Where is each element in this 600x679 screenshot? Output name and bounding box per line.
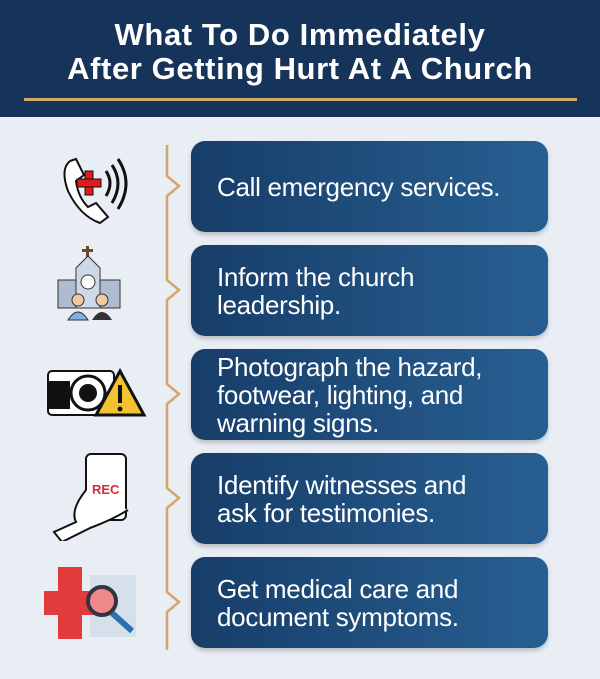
title: After Getting Hurt At A Church <box>67 51 533 86</box>
step 4 box <box>191 453 548 544</box>
step 5 box: document symptoms. <box>217 602 459 632</box>
step 2 box: Inform the church <box>217 262 414 292</box>
icon: medical cross and document <box>44 567 136 639</box>
step 4 box: Identify witnesses and <box>217 470 466 500</box>
timeline line with chevrons <box>166 145 181 650</box>
icon: phone recording in hand <box>52 453 128 541</box>
step 2 box: leadership. <box>217 290 341 320</box>
title: What To Do Immediately <box>115 17 485 52</box>
header <box>0 0 600 117</box>
step 1 box <box>191 141 548 232</box>
step 5 box: Get medical care and <box>217 574 458 604</box>
step 4 box: ask for testimonies. <box>217 498 435 528</box>
step 2 box <box>191 245 548 336</box>
step 3 box: footwear, lighting, and <box>217 380 463 410</box>
icon: camera and warning <box>47 368 146 416</box>
step 3 box: Photograph the hazard, <box>217 352 482 382</box>
icon: phone recording in hand: REC <box>92 482 120 497</box>
title <box>67 17 533 86</box>
step 1 box: Call emergency services. <box>217 172 500 202</box>
icon: phone with cross <box>63 158 128 224</box>
step 3 box <box>191 349 548 440</box>
step 5 box <box>191 557 548 648</box>
icon: church and people <box>58 246 120 320</box>
step 3 box: warning signs. <box>217 408 379 438</box>
